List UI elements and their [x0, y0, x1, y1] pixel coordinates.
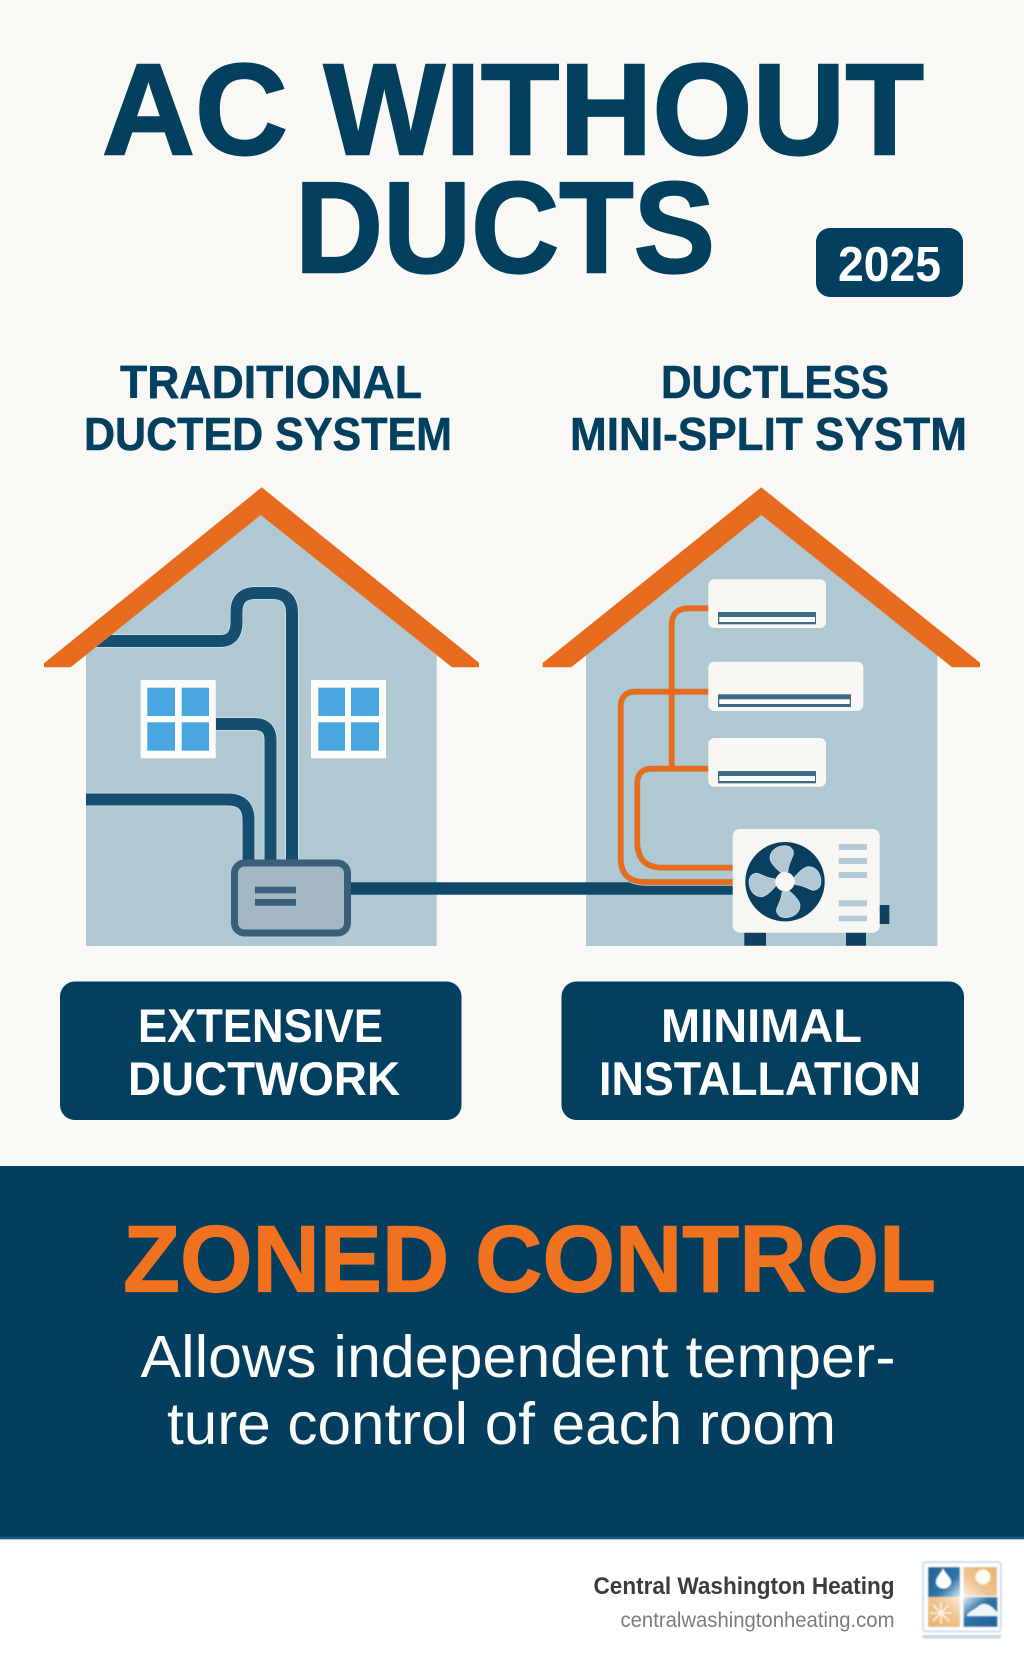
heading: ductless mini-split system: DUCTLESS: [661, 356, 889, 408]
central air handler: [234, 863, 348, 933]
ductwork: [60, 593, 292, 862]
zoned control description: [140, 1324, 896, 1457]
year badge: 2025: [838, 238, 941, 292]
heading: traditional ducted system: [84, 356, 452, 460]
roof: [543, 487, 980, 667]
logo: [923, 1562, 1001, 1638]
callout: minimal installation: INSTALLATION: [599, 1052, 921, 1105]
zoned control heading: ZONED CONTROL: [123, 1206, 936, 1312]
house body: [86, 513, 437, 946]
refrigerant lines: [621, 608, 734, 882]
title: DUCTS: [295, 154, 715, 300]
heading: ductless mini-split system: [570, 356, 967, 460]
zoned control description: Allows independent temper-: [140, 1324, 896, 1390]
indoor unit 1: [708, 579, 826, 628]
company name: Central Washington Heating: [594, 1573, 894, 1600]
left window: [141, 680, 216, 758]
zoned control description: ture control of each room: [167, 1391, 836, 1457]
outdoor condenser unit: [733, 829, 889, 946]
right window: [311, 680, 386, 758]
callout: minimal installation: [562, 982, 964, 1120]
panel: ductless house illustration: [351, 487, 980, 946]
callout: extensive ductwork: [60, 982, 462, 1120]
line set connecting the houses: [351, 882, 733, 895]
title: [102, 36, 924, 300]
callout: extensive ductwork: EXTENSIVE: [138, 999, 383, 1052]
year badge: [816, 228, 963, 297]
callout: extensive ductwork: DUCTWORK: [128, 1052, 400, 1105]
condenser louvers: [839, 844, 867, 921]
indoor unit 3: [708, 738, 826, 787]
title: AC WITHOUT: [102, 36, 924, 182]
panel: ducted house illustration: [44, 487, 479, 946]
heading: ductless mini-split system: MINI-SPLIT SYSTM: [570, 408, 967, 460]
fan: [745, 842, 825, 921]
roof: [44, 487, 479, 667]
footer: [0, 1539, 1024, 1666]
heading: traditional ducted system: DUCTED SYSTEM: [84, 408, 452, 460]
panel: zoned control band: [0, 1166, 1024, 1539]
indoor unit 2: [708, 662, 863, 711]
callout: minimal installation: MINIMAL: [661, 999, 862, 1052]
house body: [586, 513, 937, 946]
website: centralwashingtonheating.com: [620, 1609, 894, 1632]
heading: traditional ducted system: TRADITIONAL: [120, 356, 422, 408]
